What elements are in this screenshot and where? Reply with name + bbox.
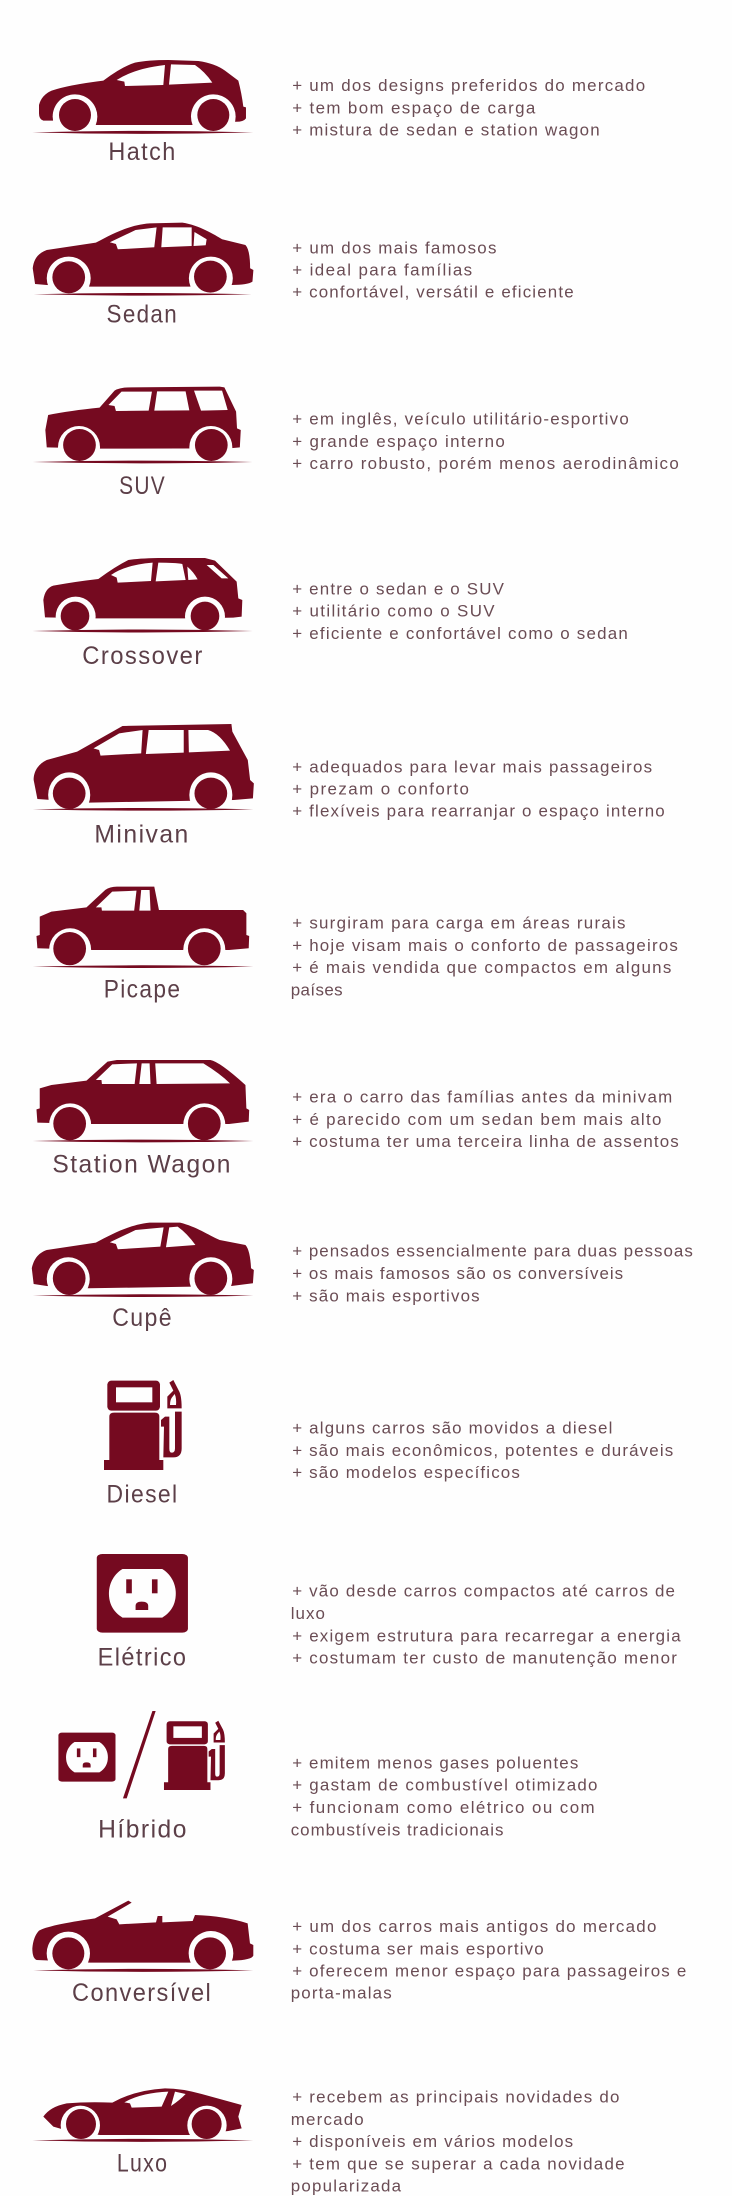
text: Minivan features: + flexíveis para rearranjar o espaço interno: [292, 802, 665, 821]
text: Conversível features: porta-malas: [291, 1984, 392, 2003]
text: Diesel features: + alguns carros são movidos a diesel: [292, 1419, 612, 1438]
panel: Hatch: [32, 60, 645, 166]
text: SUV features: + em inglês, veículo utilitário-esportivo: [292, 410, 629, 429]
text: Luxo features: popularizada: [291, 2176, 402, 2195]
text: Crossover features: + utilitário como o SUV: [292, 602, 495, 621]
text: Híbrido features: combustíveis tradicionais: [291, 1820, 503, 1839]
text: Sedan features: + confortável, versátil e eficiente: [292, 283, 574, 302]
text: SUV features: + carro robusto, porém menos aerodinâmico: [292, 454, 679, 473]
panel: Híbrido: [58, 1711, 597, 1844]
text: Conversível features: [291, 1917, 686, 2003]
label: Hatch: Hatch: [108, 138, 177, 166]
panel: Minivan: [33, 724, 665, 848]
label: Elétrico: Elétrico: [98, 1644, 187, 1672]
text: SUV features: [292, 410, 679, 473]
label: Conversível: Conversível: [72, 1979, 212, 2007]
icon: crossover car: [32, 558, 253, 637]
label: Minivan: Minivan: [94, 820, 190, 848]
label: SUV: SUV: [119, 472, 166, 500]
label: Station Wagon: Station Wagon: [52, 1151, 232, 1179]
text: Híbrido features: + funcionam como elétrico ou com: [292, 1798, 595, 1817]
text: Sedan features: [292, 238, 574, 302]
icon: fuel pump: [104, 1380, 182, 1470]
text: Picape features: + surgiram para carga em áreas rurais: [292, 914, 625, 933]
text: Conversível features: + um dos carros mais antigos do mercado: [292, 1917, 656, 1936]
text: Minivan features: + prezam o conforto: [292, 780, 469, 799]
icon: luxury sports car: [32, 2088, 253, 2145]
icon: convertible car: [32, 1901, 253, 1976]
text: Picape features: [291, 914, 678, 999]
icon: power socket: [97, 1554, 188, 1633]
label: Diesel: Diesel: [107, 1481, 179, 1509]
text: Crossover features: [292, 580, 628, 643]
text: Sedan features: + ideal para famílias: [292, 260, 472, 279]
label: Picape: Picape: [104, 976, 181, 1004]
text: Elétrico features: luxo: [291, 1604, 325, 1623]
text: Elétrico features: + exigem estrutura para recarregar a energia: [292, 1626, 681, 1645]
text: Hatch features: + tem bom espaço de carga: [292, 98, 536, 117]
text: Luxo features: + recebem as principais novidades do: [292, 2088, 619, 2107]
text: Diesel features: [292, 1419, 673, 1482]
text: Luxo features: [291, 2088, 625, 2195]
text: Hatch features: + um dos designs preferidos do mercado: [292, 76, 645, 95]
icon: hatch car: [32, 60, 253, 139]
panel: Elétrico: [97, 1554, 681, 1672]
panel: SUV: [33, 387, 679, 500]
panel: Picape: [33, 887, 678, 1004]
icon: station wagon car: [33, 1060, 253, 1147]
text: Station Wagon features: + é parecido com um sedan bem mais alto: [292, 1110, 661, 1129]
icon: minivan car: [33, 724, 254, 818]
panel: Station Wagon: [33, 1060, 679, 1179]
text: Conversível features: + oferecem menor espaço para passageiros e: [292, 1962, 686, 1981]
text: Crossover features: + entre o sedan e o SUV: [292, 580, 505, 599]
label: Luxo: Luxo: [117, 2150, 168, 2178]
text: Luxo features: mercado: [291, 2110, 364, 2129]
panel: Sedan: [33, 223, 574, 329]
text: Minivan features: + adequados para levar mais passageiros: [292, 758, 652, 777]
text: Luxo features: + tem que se superar a cada novidade: [292, 2154, 625, 2173]
text: Diesel features: + são modelos específicos: [292, 1463, 520, 1482]
text: Hatch features: + mistura de sedan e station wagon: [292, 120, 600, 139]
icon: SUV car: [33, 387, 252, 469]
text: Conversível features: + costuma ser mais esportivo: [292, 1939, 544, 1958]
text: Picape features: países: [291, 980, 343, 999]
text: Elétrico features: [291, 1582, 681, 1667]
panel: Diesel: [104, 1380, 673, 1509]
text: Station Wagon features: + era o carro das famílias antes da minivam: [292, 1087, 672, 1106]
label: Sedan: Sedan: [107, 301, 178, 329]
text: Sedan features: + um dos mais famosos: [292, 238, 496, 257]
icon: pickup truck: [33, 887, 253, 972]
text: Station Wagon features: [292, 1087, 679, 1151]
text: Diesel features: + são mais econômicos, potentes e duráveis: [292, 1441, 673, 1460]
text: Cupê features: + os mais famosos são os conversíveis: [292, 1264, 623, 1283]
panel: Conversível: [32, 1901, 686, 2007]
label: Crossover: Crossover: [82, 642, 204, 670]
text: Elétrico features: + vão desde carros compactos até carros de: [292, 1582, 675, 1601]
text: Cupê features: [292, 1242, 693, 1305]
text: Híbrido features: + gastam de combustível otimizado: [292, 1776, 597, 1795]
label: Cupê: Cupê: [112, 1304, 173, 1332]
text: Picape features: + hoje visam mais o conforto de passageiros: [292, 936, 678, 955]
text: Minivan features: [292, 758, 665, 821]
text: Station Wagon features: + costuma ter uma terceira linha de assentos: [292, 1132, 679, 1151]
text: Elétrico features: + costumam ter custo de manutenção menor: [292, 1648, 677, 1667]
panel: Crossover: [32, 558, 628, 670]
text: Cupê features: + são mais esportivos: [292, 1286, 480, 1305]
label: Híbrido: Híbrido: [98, 1816, 188, 1844]
panel: Luxo: [32, 2088, 625, 2195]
icon: socket, slash and fuel pump: [58, 1711, 225, 1798]
icon: coupe car: [32, 1223, 254, 1301]
text: Hatch features: [292, 76, 645, 139]
text: Luxo features: + disponíveis em vários modelos: [292, 2132, 573, 2151]
text: Crossover features: + eficiente e confortável como o sedan: [292, 624, 628, 643]
text: Cupê features: + pensados essencialmente para duas pessoas: [292, 1242, 693, 1261]
text: Picape features: + é mais vendida que compactos em alguns: [292, 958, 671, 977]
icon: sedan car: [33, 223, 253, 300]
text: SUV features: + grande espaço interno: [292, 432, 505, 451]
text: Híbrido features: + emitem menos gases poluentes: [292, 1753, 578, 1772]
panel: Cupê: [32, 1223, 693, 1332]
text: Híbrido features: [291, 1753, 597, 1839]
